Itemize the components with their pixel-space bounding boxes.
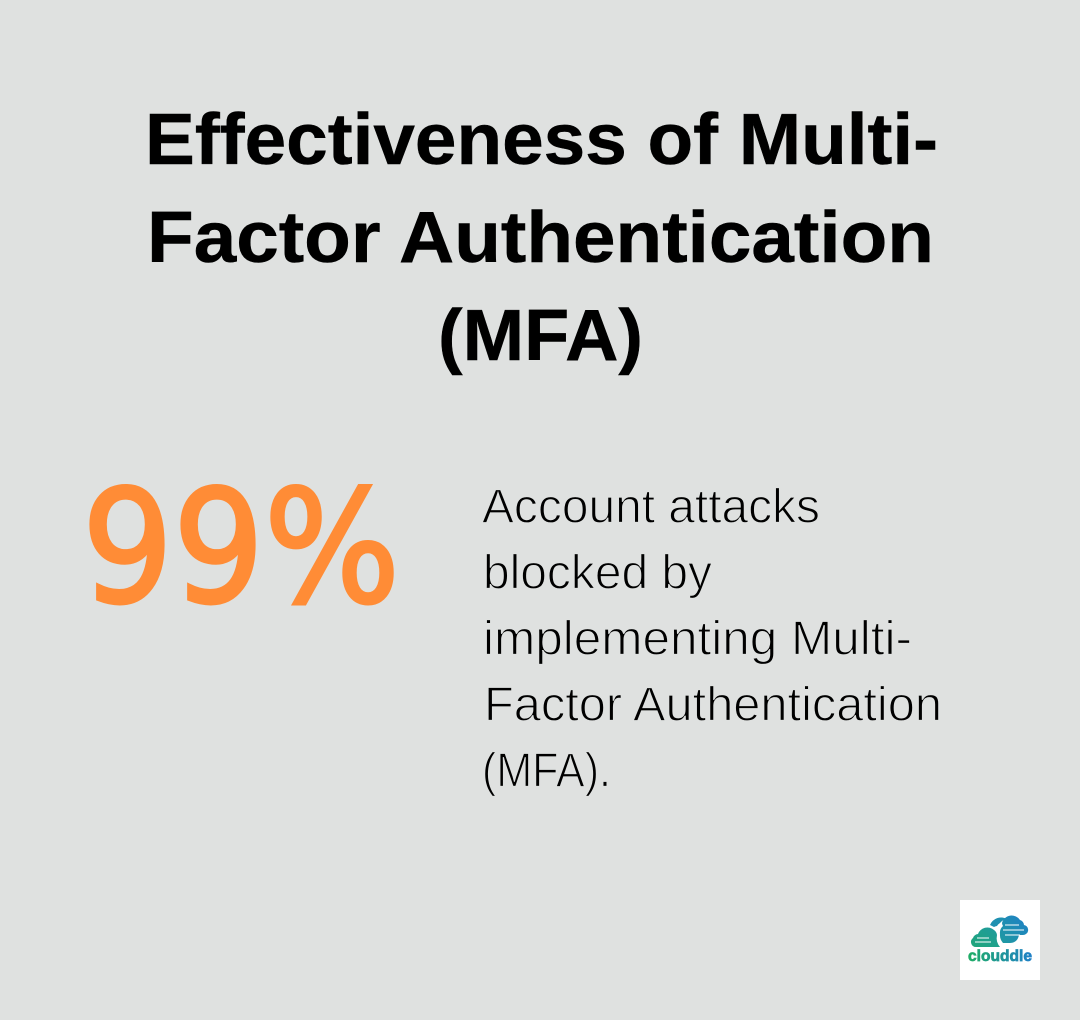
description text: Account attacks — [482, 480, 820, 534]
description text: Factor Authentication — [484, 678, 942, 732]
big statistic: 99%: 99% — [82, 456, 400, 638]
description text: (MFA). — [482, 744, 611, 798]
title — [145, 100, 938, 376]
title: Effectiveness of Multi- — [145, 100, 938, 180]
logo: clouddle — [960, 900, 1040, 980]
title: Factor Authentication — [147, 198, 934, 278]
description text — [482, 480, 942, 798]
description text: implementing Multi- — [483, 612, 912, 666]
icon: clouds — [971, 916, 1028, 947]
logo wordmark: clouddle — [968, 948, 1032, 965]
description text: blocked by — [483, 546, 713, 600]
title: (MFA) — [438, 296, 643, 376]
